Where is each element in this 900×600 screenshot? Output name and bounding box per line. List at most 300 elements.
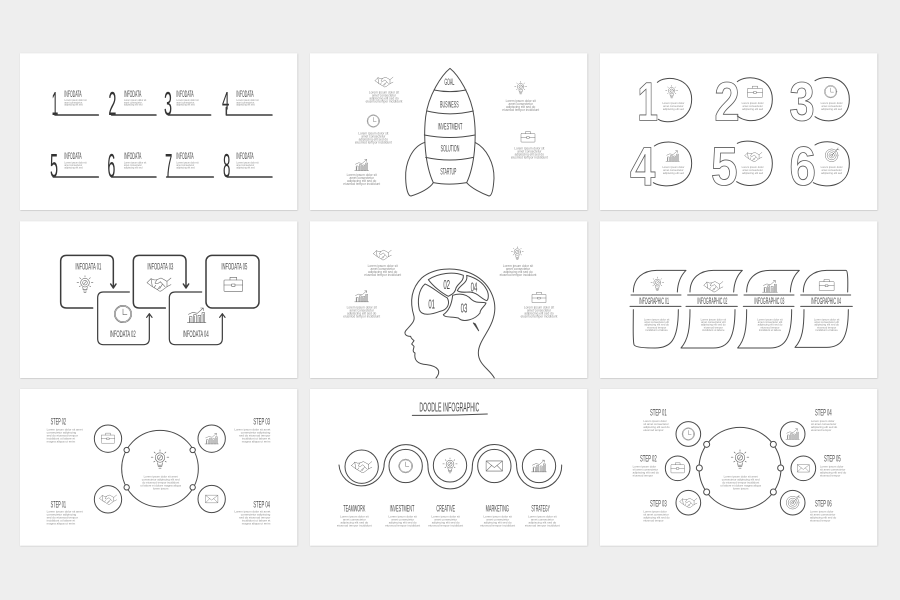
step 02: Lorem ipsum dolor	[633, 465, 656, 469]
item 1: adipiscing elit sed	[64, 104, 83, 107]
panel: big outlined numbers one to six	[600, 53, 877, 210]
investment label: eiusmod tempor incididunt	[385, 524, 420, 528]
panel card	[600, 53, 877, 210]
item 8: adipiscing elit sed	[236, 166, 255, 169]
central text: do eiusmod tempor incididunt	[722, 480, 759, 484]
text block: adipiscing elit sed do	[347, 179, 377, 183]
text block: adipiscing elit sed do	[503, 270, 533, 274]
item 3: Lorem ipsum dolor sit	[176, 99, 199, 102]
marketing label: Lorem ipsum dolor sit	[483, 515, 512, 519]
text block: amet consectetur	[350, 308, 374, 312]
wave line	[339, 444, 562, 489]
step 04	[780, 408, 838, 446]
teamwork label: amet consectetur	[343, 518, 366, 522]
icon: growth chart	[355, 159, 369, 170]
central text: lorem ipsum	[153, 486, 169, 490]
item 4: 4	[222, 87, 229, 115]
investment label	[385, 504, 420, 528]
step 06: adipiscing elit sed do	[810, 515, 837, 519]
item 6: Lorem ipsum dolor sit	[124, 162, 147, 165]
step 03: Lorem ipsum dolor	[643, 509, 667, 513]
panel card	[20, 389, 297, 546]
text block: eiusmod tempor incididunt	[343, 314, 380, 318]
item 5: Lorem ipsum dolor sit	[64, 162, 87, 165]
item 6: 6	[107, 148, 115, 185]
number 3 with circle: adipiscing elit sed	[821, 107, 843, 111]
item 2: INFODATA	[124, 89, 142, 99]
investment label: amet consectetur	[391, 518, 414, 522]
rocket section labels: STARTUP	[440, 166, 456, 176]
item 3: amet consectetur	[176, 101, 194, 104]
creative label: amet consectetur	[434, 518, 457, 522]
column 2	[681, 270, 742, 348]
step 03: incididunt ut labore et	[242, 437, 270, 441]
step 02: sed do eiusmod tempor	[47, 434, 78, 438]
text block: amet consectetur	[509, 102, 533, 106]
text block: adipiscing elit sed do	[347, 311, 377, 315]
icon: handshake	[375, 77, 393, 87]
marketing label: MARKETING	[486, 504, 509, 514]
teamwork label: eiusmod tempor incididunt	[337, 524, 372, 528]
text block: Lorem ipsum dolor sit	[368, 264, 398, 268]
number 4 with circle: Lorem ipsum dolor	[662, 165, 684, 169]
text block: Lorem ipsum dolor sit	[347, 173, 377, 177]
text block: adipiscing elit sed do	[524, 311, 554, 315]
step 03: sed do eiusmod tempor	[239, 434, 270, 438]
marketing label	[480, 504, 515, 528]
creative label: adipiscing elit sed do	[432, 521, 460, 525]
number 2 with circle: amet consectetur	[742, 104, 763, 108]
column 3	[738, 270, 799, 348]
number 4 with circle: 4	[630, 135, 656, 197]
panel: human head with brain	[310, 221, 587, 378]
item 8: Lorem ipsum dolor sit	[236, 162, 259, 165]
step 02	[47, 416, 122, 452]
icon: clock	[367, 115, 380, 127]
step 06: Lorem ipsum dolor	[810, 509, 833, 513]
central text: Lorem ipsum dolor sit amet	[724, 474, 758, 478]
step 01: Lorem ipsum dolor sit amet	[47, 510, 83, 514]
circle and icon: handshake	[345, 450, 378, 483]
text block: eiusmod tempor incididunt	[521, 314, 558, 318]
central text: consectetur adipiscing elit sed	[722, 477, 760, 481]
item 6: adipiscing elit sed	[124, 166, 143, 169]
column 1: adipiscing elit sed do	[644, 323, 670, 327]
number 1 with circle: amet consectetur	[663, 104, 684, 108]
lobe numbers: 01	[428, 297, 435, 312]
circle and icon: light bulb	[433, 449, 467, 482]
number 2 with circle: Lorem ipsum dolor	[742, 101, 764, 105]
panel: rocket infographic	[310, 53, 587, 210]
brain lobe 01	[418, 284, 449, 314]
column 4: eiusmod tempor	[817, 325, 836, 329]
brain lobe 03	[443, 294, 486, 331]
step 02: incididunt ut labore et	[47, 437, 75, 441]
text block: adipiscing elit sed do	[368, 270, 398, 274]
item 8: 8	[223, 148, 230, 185]
item 2: 2	[108, 86, 116, 123]
step 03: adipiscing elit sed do	[643, 515, 670, 519]
text block: amet consectetur	[506, 267, 530, 271]
step 01: incididunt ut labore et	[47, 519, 75, 523]
step 03: eiusmod tempor	[643, 518, 664, 522]
column 2: Lorem ipsum dolor sit	[701, 317, 726, 321]
title underline	[412, 414, 487, 415]
item 2: amet consectetur	[124, 101, 142, 104]
icon: briefcase	[224, 277, 243, 291]
text block: eiusmod tempor incididunt	[355, 141, 392, 145]
number 2 with circle: 2	[714, 71, 740, 133]
item 4	[222, 87, 272, 115]
rocket section labels	[438, 77, 462, 176]
item 7: adipiscing elit sed	[176, 166, 195, 169]
column 2: eiusmod tempor	[704, 325, 723, 329]
column 3: eiusmod tempor	[760, 325, 780, 329]
number 3 with circle: 3	[789, 71, 815, 133]
step 03	[643, 490, 701, 522]
panel: circle with six steps	[600, 389, 877, 546]
text block: adipiscing elit sed do	[506, 105, 536, 109]
strategy label: eiusmod tempor incididunt	[525, 524, 560, 528]
creative label: CREATIVE	[436, 504, 455, 514]
number 6 with circle	[789, 135, 849, 197]
teamwork label	[337, 504, 372, 528]
number 5 with circle: adipiscing elit sed	[742, 171, 764, 175]
box 02 with arrow	[98, 292, 152, 345]
item 7	[165, 148, 213, 185]
lobe numbers: 02	[443, 277, 450, 292]
step 04: sit amet consectetur	[811, 422, 836, 426]
step 02: eiusmod tempor	[633, 474, 653, 478]
box titles	[75, 261, 247, 339]
number 2 with circle	[714, 71, 772, 133]
icon: light bulb	[731, 450, 749, 468]
number 6 with circle: 6	[789, 135, 816, 197]
text block: Lorem ipsum dolor sit	[369, 90, 399, 94]
panel: doodle infographic wave: DOODLE INFOGRAPHIC	[419, 400, 479, 415]
rocket section labels: GOAL	[444, 77, 454, 87]
head outline	[405, 269, 495, 378]
icon: briefcase	[521, 132, 535, 142]
icon: handshake	[147, 278, 171, 291]
step 05: STEP 05	[824, 454, 841, 464]
column 4	[795, 270, 852, 347]
step 03	[198, 416, 271, 452]
step 03: sit amet consectetur	[643, 512, 669, 516]
column 1: eiusmod tempor	[647, 325, 666, 329]
step 05: adipiscing elit sed do	[820, 471, 847, 475]
step 04: magna aliqua ut enim	[242, 522, 271, 526]
number 1 with circle: 1	[637, 71, 658, 133]
column 3: incididunt ut labore	[759, 328, 782, 332]
central text: do eiusmod tempor incididunt	[142, 480, 179, 484]
box titles: INFODATA 04	[183, 329, 209, 339]
text block: adipiscing elit sed do	[515, 152, 544, 156]
text block: Lorem ipsum dolor sit	[358, 132, 389, 136]
item 2: adipiscing elit sed	[124, 104, 143, 107]
step 03: STEP 03	[650, 499, 667, 509]
panel card	[600, 389, 877, 546]
marketing label: eiusmod tempor incididunt	[480, 524, 515, 528]
box 05	[206, 255, 259, 308]
number 3 with circle	[789, 71, 849, 133]
item 4: Lorem ipsum dolor sit	[236, 99, 259, 102]
column 1: Lorem ipsum dolor sit	[644, 317, 670, 321]
creative label	[428, 504, 463, 528]
step 01: eiusmod tempor	[643, 428, 664, 432]
text block: Lorem ipsum dolor sit	[347, 305, 377, 309]
number 1 with circle: adipiscing elit sed	[663, 107, 684, 111]
item 3: adipiscing elit sed	[176, 104, 195, 107]
icon: briefcase	[532, 292, 546, 303]
text block: eiusmod tempor incididunt	[343, 182, 380, 186]
item 6	[107, 148, 156, 185]
item 1: 1	[52, 86, 58, 123]
panel: stepped flow boxes: INFODATA 05	[221, 261, 247, 271]
step 01: magna aliqua ut enim	[47, 522, 76, 526]
step 02: sit amet consectetur	[633, 468, 658, 472]
number 3 with circle: amet consectetur	[821, 104, 842, 108]
item 7: Lorem ipsum dolor sit	[176, 162, 199, 165]
column 4: incididunt ut labore	[816, 328, 838, 332]
text block: eiusmod tempor incididunt	[366, 99, 403, 103]
step 06	[780, 490, 837, 522]
step 05: eiusmod tempor	[820, 474, 840, 478]
step 03: Lorem ipsum dolor sit amet	[234, 428, 270, 432]
strategy label	[525, 504, 560, 528]
number 4 with circle	[630, 135, 692, 197]
item 2	[108, 86, 156, 123]
step 01	[47, 486, 122, 526]
step 03: magna aliqua ut enim	[242, 440, 271, 444]
panel: circle with four steps: STEP 03	[253, 416, 270, 426]
text block: adipiscing elit sed do	[369, 96, 399, 100]
panel card	[310, 221, 587, 378]
step 04: sed do eiusmod tempor	[239, 516, 270, 520]
step 02: STEP 02	[640, 454, 657, 464]
column 4: Lorem ipsum dolor sit	[814, 317, 840, 321]
panel: doodle infographic wave	[310, 389, 587, 546]
text block: Lorem ipsum dolor sit	[524, 305, 554, 309]
step 02	[633, 454, 690, 481]
number 6 with circle: amet consectetur	[821, 168, 842, 172]
step 01: sed do eiusmod tempor	[47, 516, 78, 520]
central circle with nodes	[696, 427, 784, 509]
text block: amet consectetur	[361, 135, 385, 139]
text block: Lorem ipsum dolor sit	[506, 99, 536, 103]
icon: growth chart	[355, 291, 369, 302]
step 04	[198, 485, 271, 526]
step 01: consectetur adipiscing	[47, 513, 77, 517]
icon: clock	[114, 305, 132, 323]
number 1 with circle	[637, 71, 692, 133]
investment label: INVESTMENT	[390, 504, 414, 514]
number 5 with circle	[711, 135, 772, 197]
step 04: adipiscing elit sed do	[811, 425, 838, 429]
teamwork label: TEAMWORK	[343, 504, 366, 514]
panel card	[20, 221, 297, 378]
item 8	[223, 148, 272, 185]
panel card	[310, 389, 587, 546]
step 05	[791, 454, 847, 481]
investment label: adipiscing elit sed do	[389, 521, 417, 525]
number 6 with circle: Lorem ipsum dolor	[821, 165, 843, 169]
item 1: amet consectetur	[64, 101, 82, 104]
box 01 with arrow	[61, 255, 116, 308]
item 6: amet consectetur	[124, 164, 142, 167]
item 4: amet consectetur	[236, 101, 254, 104]
step 02: magna aliqua ut enim	[47, 440, 76, 444]
creative label: Lorem ipsum dolor sit	[431, 515, 460, 519]
text block: Lorem ipsum dolor sit	[514, 146, 545, 150]
item 7: amet consectetur	[176, 164, 194, 167]
panel card	[600, 221, 877, 378]
panel: circle with four steps: STEP 04	[253, 499, 270, 509]
circle and icon: growth chart	[522, 449, 556, 483]
column 2: incididunt ut labore	[702, 328, 725, 332]
text block: adipiscing elit sed do	[359, 138, 388, 142]
icon: handshake	[373, 250, 391, 260]
column 3: adipiscing elit sed do	[758, 323, 783, 327]
step 01: STEP 01	[51, 499, 66, 509]
icon: light bulb	[511, 247, 523, 259]
circle and icon: envelope	[478, 449, 511, 483]
text block: amet consectetur	[372, 93, 396, 97]
icon: light bulb	[151, 450, 169, 468]
central text: consectetur adipiscing elit sed	[142, 477, 180, 481]
column 1: INFOGRAPHIC 01	[639, 296, 669, 306]
lobe numbers	[428, 277, 478, 315]
column 1: incididunt ut labore	[646, 328, 668, 332]
number 5 with circle: 5	[711, 135, 738, 197]
step 01: STEP 01	[650, 408, 667, 418]
item 3: 3	[164, 86, 172, 123]
step 04: Lorem ipsum dolor sit amet	[234, 510, 270, 514]
step 04: STEP 04	[815, 408, 832, 418]
item 1: Lorem ipsum dolor sit	[64, 99, 87, 102]
column 1: amet consectetur elit	[644, 320, 669, 324]
step 01: sit amet consectetur	[643, 422, 669, 426]
panel: rocket infographic: SOLUTION	[441, 144, 459, 154]
item 7: INFODATA	[176, 151, 194, 161]
panel card	[310, 53, 587, 210]
rocket drawing	[406, 68, 494, 196]
investment label: Lorem ipsum dolor sit	[388, 515, 417, 519]
teamwork label: adipiscing elit sed do	[340, 521, 369, 525]
item 3	[164, 86, 211, 123]
step 04: consectetur adipiscing	[241, 513, 271, 517]
item 5	[50, 148, 98, 185]
panel: numbered list one to eight	[20, 53, 297, 210]
teamwork label: Lorem ipsum dolor sit	[340, 515, 369, 519]
box 04 with arrow	[169, 292, 225, 345]
central text: ut labore et dolore magna aliqua	[720, 483, 761, 487]
box titles: INFODATA 02	[110, 329, 136, 339]
step 05: sit amet consectetur	[820, 468, 845, 472]
step 04: Lorem ipsum dolor	[811, 419, 834, 423]
text block: eiusmod tempor incididunt	[500, 273, 537, 277]
step 04: eiusmod tempor	[811, 428, 831, 432]
text block: eiusmod tempor incididunt	[364, 273, 401, 277]
step 05: Lorem ipsum dolor	[820, 465, 843, 469]
strategy label: Lorem ipsum dolor sit	[528, 515, 557, 519]
text block: amet consectetur	[350, 176, 374, 180]
number 3 with circle: Lorem ipsum dolor	[821, 101, 843, 105]
item 5: amet consectetur	[64, 164, 82, 167]
step 01: adipiscing elit sed do	[643, 425, 670, 429]
column 3: INFOGRAPHIC 03	[754, 296, 784, 306]
number 6 with circle: adipiscing elit sed	[821, 171, 843, 175]
strategy label: STRATEGY	[531, 504, 550, 514]
step 06: eiusmod tempor	[810, 518, 830, 522]
column 3: amet consectetur elit	[758, 320, 783, 324]
text block: amet consectetur	[527, 308, 551, 312]
panel: stepped flow boxes	[20, 221, 297, 378]
column 4: adipiscing elit sed do	[814, 323, 840, 327]
column 1	[630, 270, 686, 348]
step 03: consectetur adipiscing	[241, 431, 271, 435]
item 3: INFODATA	[176, 89, 194, 99]
central text: lorem ipsum	[733, 486, 749, 490]
panel: four leaf columns	[600, 221, 877, 378]
step 06: sit amet consectetur	[810, 512, 835, 516]
panel card	[20, 53, 297, 210]
box titles: INFODATA 03	[147, 261, 173, 271]
step 02: Lorem ipsum dolor sit amet	[47, 428, 83, 432]
column 2: INFOGRAPHIC 02	[697, 296, 727, 306]
column 4: INFOGRAPHIC 04	[811, 296, 841, 306]
step 01: Lorem ipsum dolor	[643, 419, 667, 423]
box 03 with arrow	[133, 255, 189, 308]
step 02: adipiscing elit sed do	[633, 471, 659, 475]
step 02: consectetur adipiscing	[47, 431, 77, 435]
item 8: INFODATA	[236, 151, 254, 161]
text block: eiusmod tempor incididunt	[511, 155, 548, 159]
lobe numbers: 03	[461, 300, 467, 315]
brain lobe 04	[457, 275, 488, 301]
icon: light bulb	[77, 276, 93, 292]
central text: Lorem ipsum dolor sit amet	[144, 474, 178, 478]
marketing label: adipiscing elit sed do	[484, 521, 512, 525]
number 1 with circle: Lorem ipsum dolor	[662, 101, 684, 105]
creative label: eiusmod tempor incididunt	[428, 524, 463, 528]
brain lobe 02	[428, 273, 463, 296]
panel: rocket infographic: INVESTMENT	[438, 121, 462, 131]
panel: circle with four steps	[20, 389, 297, 546]
number 4 with circle: adipiscing elit sed	[663, 171, 684, 175]
item 7: 7	[165, 148, 172, 185]
central circle with nodes	[122, 430, 198, 507]
step 06: STEP 06	[815, 499, 832, 509]
step 01	[643, 408, 701, 446]
item 4: adipiscing elit sed	[236, 104, 255, 107]
item 1	[52, 86, 98, 123]
column 4: amet consectetur elit	[814, 320, 839, 324]
text block: eiusmod tempor incididunt	[502, 108, 539, 112]
number 4 with circle: amet consectetur	[663, 168, 684, 172]
column 2: amet consectetur elit	[701, 320, 726, 324]
item 1: INFODATA	[64, 89, 82, 99]
marketing label: amet consectetur	[486, 518, 509, 522]
number 2 with circle: adipiscing elit sed	[742, 107, 764, 111]
number 5 with circle: amet consectetur	[742, 168, 763, 172]
text block: Lorem ipsum dolor sit	[503, 264, 533, 268]
box titles: INFODATA 01	[75, 261, 101, 271]
item 4: INFODATA	[236, 89, 254, 99]
strategy label: amet consectetur	[531, 518, 554, 522]
item 2: Lorem ipsum dolor sit	[124, 99, 147, 102]
item 5: INFODATA	[64, 151, 82, 161]
